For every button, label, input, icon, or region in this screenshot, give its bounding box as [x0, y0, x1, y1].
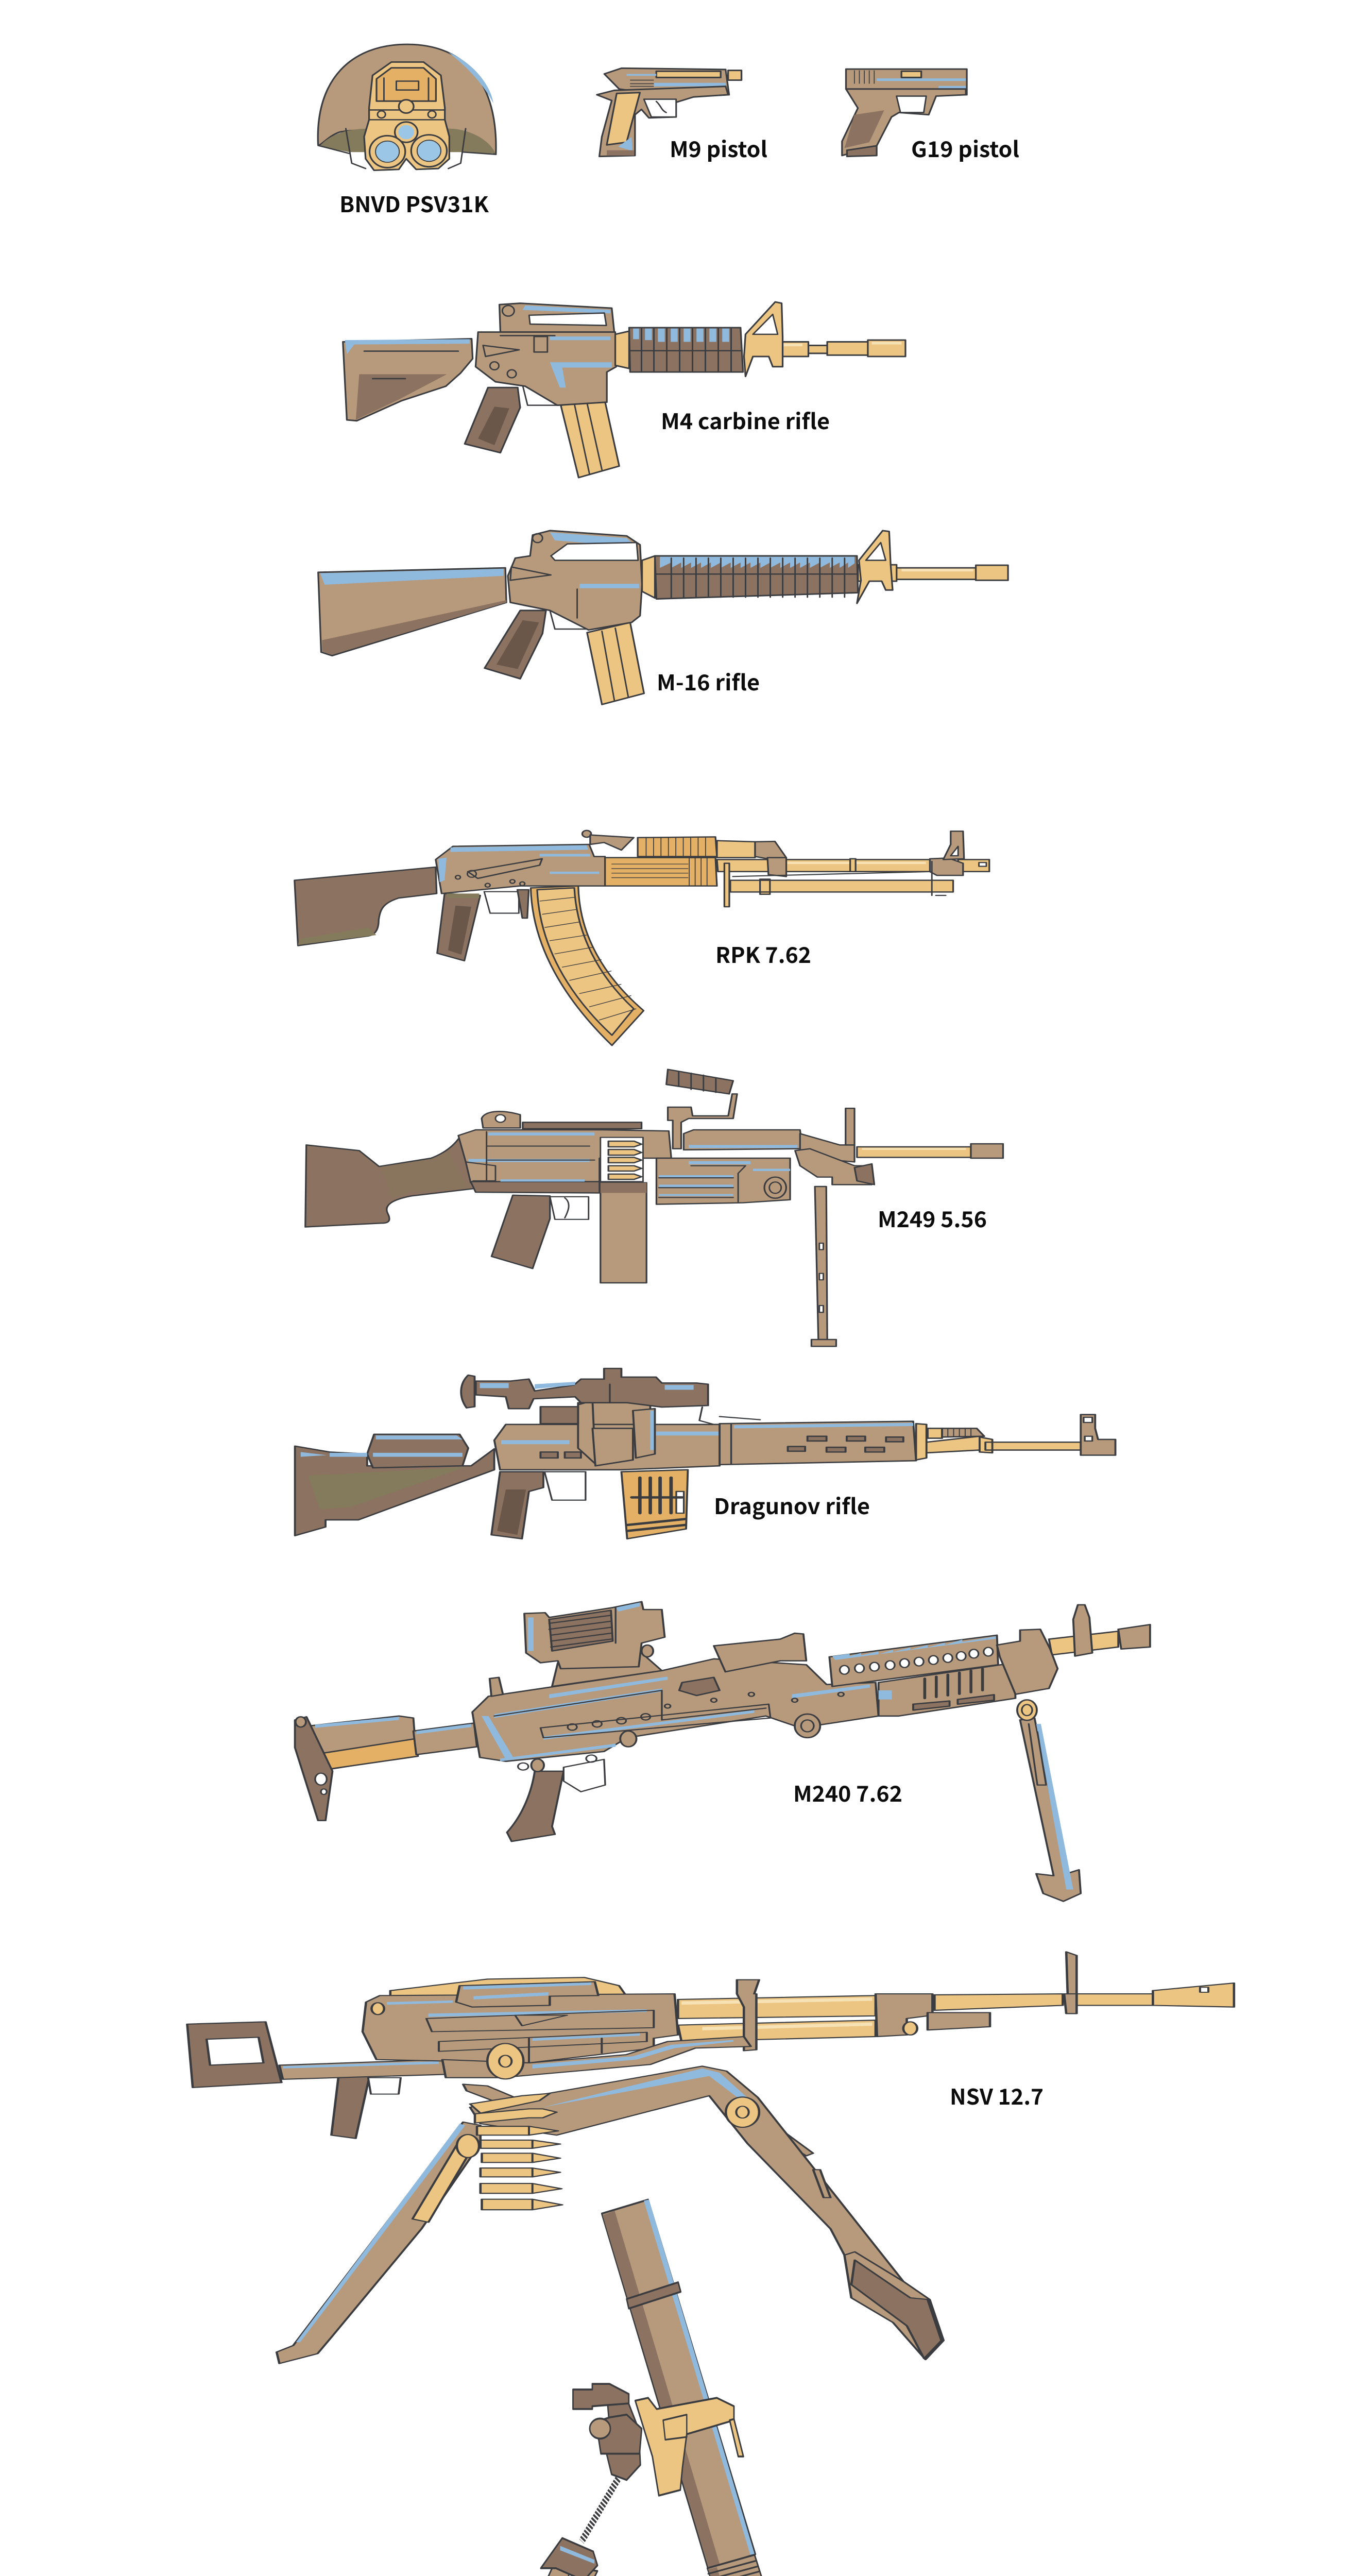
magazine [587, 622, 644, 704]
lower handguard [605, 858, 717, 886]
icon: M9 pistol [596, 67, 743, 158]
gold sight clamp [635, 2398, 734, 2496]
forward body [656, 1158, 790, 1205]
stock [295, 1446, 494, 1535]
grip and trigger [491, 1195, 550, 1268]
receiver [458, 1130, 671, 1183]
ammunition belt [470, 2093, 562, 2210]
rail with holes [830, 1635, 998, 1686]
stock [310, 1716, 416, 1769]
label: M-16 rifle: M-16 rifle [657, 666, 760, 697]
icon: RPK rifle [294, 829, 990, 1046]
icon: Dragunov rifle [294, 1367, 1117, 1539]
scope [461, 1368, 714, 1424]
grip [507, 1771, 564, 1841]
label: M249 5.56: M249 5.56 [878, 1202, 987, 1234]
stock [295, 867, 437, 946]
receiver [390, 1977, 626, 1999]
tripod left leg [277, 2122, 481, 2363]
grip [484, 611, 546, 679]
rear spade handle [187, 2022, 281, 2088]
carry handle and receiver [499, 303, 614, 332]
icon: NSV machine gun on tripod [182, 1950, 1236, 2365]
scope mount [578, 1402, 651, 1428]
cradle with disc [442, 2037, 751, 2078]
stock [318, 568, 506, 656]
optic mount [552, 1653, 662, 1686]
forward lower [879, 1663, 1016, 1716]
icon: BNVD helmet with night vision [317, 43, 497, 171]
grip and trigger [491, 1471, 543, 1538]
tripod right leg [764, 2125, 813, 2156]
handguard [720, 1421, 916, 1464]
label: M4 carbine rifle: M4 carbine rifle [661, 404, 830, 436]
label: RPK 7.62: RPK 7.62 [715, 938, 811, 970]
barrel and bipod [717, 860, 989, 872]
receiver [472, 1659, 879, 1761]
receiver [436, 844, 605, 894]
receiver and carry handle [508, 531, 642, 630]
magazine [560, 398, 619, 477]
gas block and barrel [1049, 1631, 1118, 1655]
receiver [494, 1424, 720, 1469]
label: G19 pistol: G19 pistol [911, 132, 1019, 164]
stock [305, 1136, 475, 1227]
label: M240 7.62: M240 7.62 [793, 1777, 902, 1808]
barrels [678, 1952, 1234, 2050]
optic [524, 1602, 665, 1669]
upper handguard and gas tube [717, 841, 755, 858]
icon: M240 machine gun [294, 1601, 1151, 1902]
grip and trigger [437, 894, 481, 961]
handguard [655, 556, 858, 599]
magazine [622, 1469, 688, 1538]
gas block and sights [800, 1133, 854, 1162]
helmet shell [318, 44, 496, 155]
icon: M249 machine gun [304, 1069, 1004, 1347]
label: M9 pistol: M9 pistol [670, 132, 767, 164]
ammo window [600, 1138, 643, 1182]
night vision goggles [364, 62, 449, 171]
stock [343, 338, 472, 420]
tube [602, 2199, 756, 2569]
icon: G19 pistol [841, 68, 968, 158]
barrel [916, 1423, 1081, 1460]
label: Dragunov rifle: Dragunov rifle [714, 1489, 870, 1521]
grip [331, 2076, 369, 2139]
icon: M-16 rifle [317, 530, 1009, 705]
label: NSV 12.7: NSV 12.7 [950, 2080, 1044, 2111]
label: BNVD PSV31K: BNVD PSV31K [339, 188, 489, 219]
elevating screw and sight mount [573, 2384, 642, 2541]
icon: 60mm mortar [373, 2197, 953, 2576]
bipod [1017, 1700, 1081, 1901]
threaded sections [707, 2555, 826, 2576]
barrel [857, 1147, 970, 1158]
barrel and front sight [745, 340, 905, 356]
magazine [531, 886, 644, 1045]
bipod leg [815, 1187, 827, 1340]
icon: M4 carbine rifle [342, 301, 907, 478]
feed cover handle [714, 1633, 807, 1672]
carry handle [666, 1070, 737, 1149]
handguard [615, 331, 629, 368]
bipod leg [374, 2538, 603, 2576]
grip [465, 387, 520, 452]
barrel and front sight [858, 565, 1008, 581]
magazine box [600, 1183, 646, 1283]
